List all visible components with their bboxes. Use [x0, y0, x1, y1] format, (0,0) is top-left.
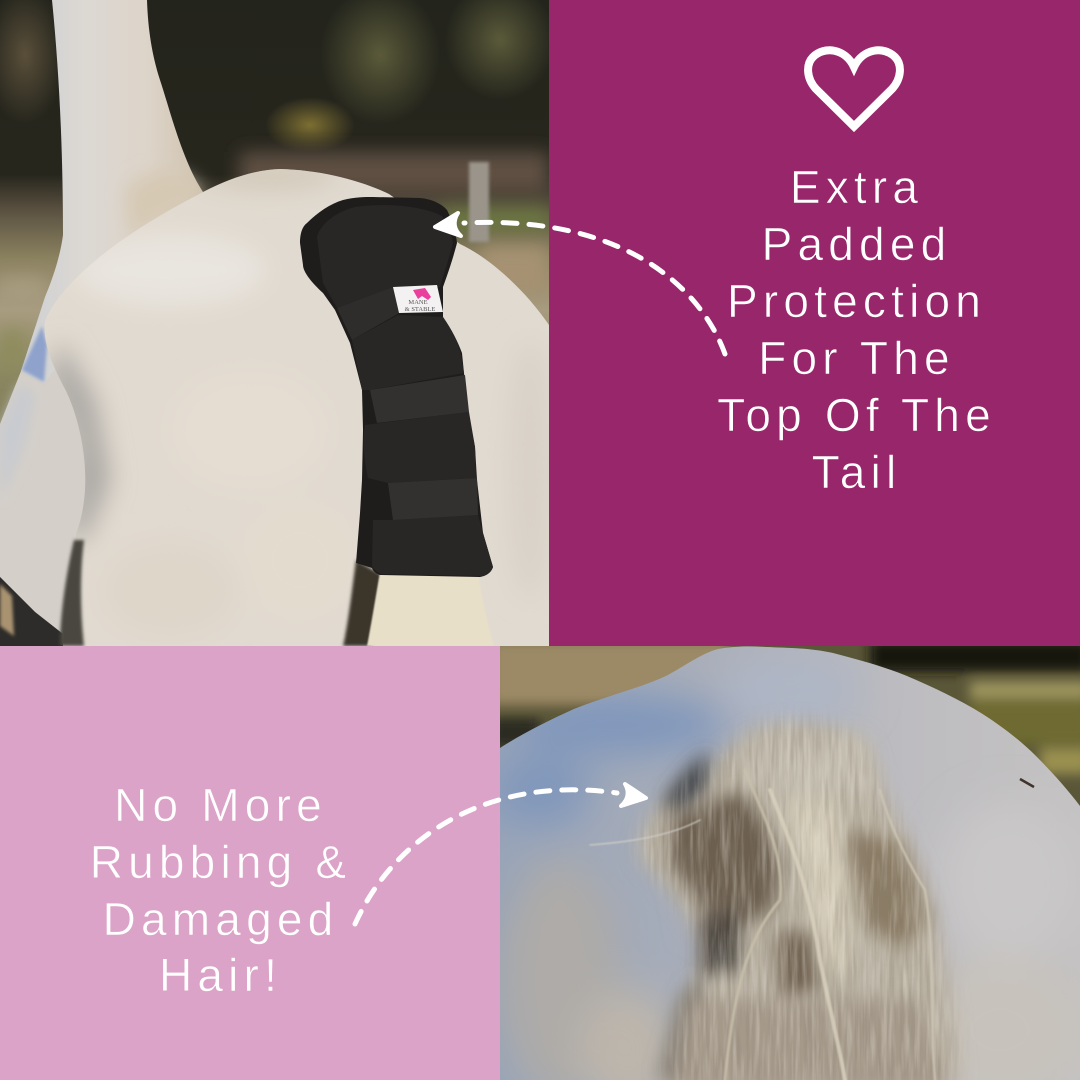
rubbed hair patch — [639, 723, 960, 1080]
body text: no more rubbing: Hair! — [159, 949, 282, 1001]
heading: extra padded protection: Top Of The — [717, 389, 996, 441]
horse rump — [44, 169, 549, 646]
photo: horse wearing black tail wrap — [0, 0, 555, 646]
rump — [490, 640, 1080, 1080]
heading: extra padded protection: Padded — [762, 218, 951, 270]
heading: extra padded protection: Protection — [727, 275, 986, 327]
blue shadow on shoulder — [22, 326, 47, 382]
wrap label: MANE — [408, 299, 428, 306]
velcro strap 3 — [388, 478, 478, 520]
fence post — [469, 162, 489, 242]
body text: no more rubbing: Rubbing & — [90, 836, 351, 888]
background panel: dark magenta — [549, 0, 1080, 646]
small dark mark — [1020, 779, 1034, 787]
body text: no more rubbing: Damaged — [103, 893, 338, 945]
velcro strap 2 — [370, 375, 469, 423]
arrow: from body text to rubbed hair — [355, 784, 646, 924]
heading: extra padded protection: Extra — [790, 161, 923, 213]
far body — [0, 369, 86, 633]
arrow: from heading to top of tail wrap — [435, 213, 725, 354]
dark lower-left corner — [0, 577, 68, 646]
tail hair — [366, 574, 386, 646]
heading: extra padded protection: For The — [758, 332, 955, 384]
heading: extra padded protection: Tail — [812, 446, 901, 498]
black tail wrap — [300, 197, 493, 577]
wrap label: & STABLE — [405, 306, 435, 313]
fur texture — [644, 720, 952, 1080]
velcro strap 1 — [337, 287, 399, 340]
shadow beside tail — [343, 560, 382, 646]
wrap label — [393, 285, 443, 313]
body text: no more rubbing — [90, 779, 351, 1001]
body text: no more rubbing: No More — [114, 779, 327, 831]
icon: heart outline — [808, 50, 900, 127]
rump shadow at lower left — [60, 540, 84, 646]
photo: rubbed tail hair on grey horse — [490, 640, 1080, 1080]
hair strands — [590, 770, 935, 1080]
heading: extra padded protection — [717, 161, 996, 498]
horse neck — [21, 0, 203, 384]
background panel: light pink — [0, 646, 500, 1080]
